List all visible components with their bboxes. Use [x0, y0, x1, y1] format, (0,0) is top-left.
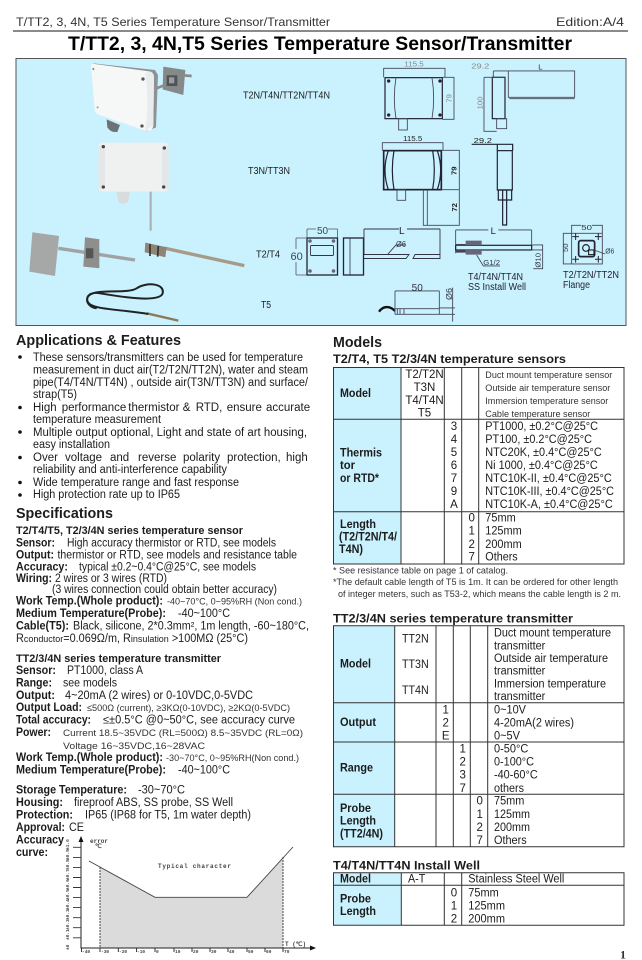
feature list: polarity [183, 452, 220, 464]
table: install well: 125mm [468, 900, 505, 912]
chart: accuracy curve: ±0 [65, 944, 71, 950]
row: Thermistor or RTD: Ni 1000, ±0.4°C@25°C [485, 460, 598, 472]
row: Probe Length [340, 796, 530, 847]
transmitter specifications: Total accuracy: [16, 714, 91, 726]
chart: accuracy curve: ±0.2 [65, 919, 71, 930]
heading: install well: T4/T4N/TT4N Install Well [333, 858, 480, 872]
row: Thermistor or RTD: Thermis [340, 448, 382, 460]
row: Thermistor or RTD: PT100, ±0.2°C@25°C [485, 434, 592, 446]
chart: accuracy curve: ±0.6 [65, 879, 71, 890]
row: Range: 0-100°C [494, 757, 534, 769]
drawing: install well [456, 226, 543, 269]
table notes: of integer meters, such as T53-2, which means the cable length is 2 m. [338, 589, 621, 600]
feature list: easy installation [33, 439, 110, 451]
feature list: high [286, 452, 308, 464]
row: Model: Model [340, 659, 371, 671]
heading: Specifications: Specifications [16, 505, 113, 522]
table notes [333, 566, 621, 600]
table: install well: 2 [451, 914, 457, 926]
heading: temperature sensors: T2/T4, T5 T2/3/4N temperature sensors [333, 352, 566, 366]
general specifications: Housing: [16, 797, 63, 809]
row: Thermistor or RTD: 9 [451, 486, 457, 498]
table notes: * See resistance table on page 1 of catalog. [333, 566, 508, 576]
chart: accuracy curve: 0 [156, 949, 159, 955]
general specifications: fireproof ABS, SS probe, SS Well [74, 797, 233, 809]
transmitter specifications: -40~100°C [178, 764, 230, 776]
chart: accuracy curve: 20 [193, 949, 199, 955]
chart: accuracy curve: Typical character [158, 863, 231, 870]
sensor specifications: Output: [16, 550, 54, 562]
chart: accuracy curve: T (℃) [285, 941, 306, 948]
transmitter specifications: Output Load: [16, 702, 82, 714]
feature list: measurement in duct air(T2/T2N/TT2N), water and steam [33, 364, 308, 376]
row: Range [340, 743, 538, 795]
drawing: T5 probe: 50 [412, 283, 423, 294]
general specifications: Storage Temperature: [16, 784, 127, 796]
row: Range: Range [340, 763, 373, 775]
row: Probe Length: 7 [476, 835, 483, 847]
table: install well: A-T [408, 874, 425, 886]
row: Output: 4-20mA(2 wires) [494, 717, 574, 729]
sensor specifications: Sensor: [16, 538, 55, 550]
row: Thermistor or RTD: NTC10K-A, ±0.4°C@25°C [485, 499, 613, 511]
feature list: RTD, [196, 402, 222, 414]
row: Length: 7 [468, 552, 475, 564]
row: Length: Length [340, 519, 376, 531]
heading: Applications & Features: Applications & Features [16, 332, 181, 349]
transmitter specifications: ≤500Ω (current), ≥3KΩ(0-10VDC), ≥2KΩ(0-5VDC) [87, 703, 290, 714]
drawing: flange: Ø6 [605, 246, 614, 255]
chart: accuracy curve: 30 [211, 949, 217, 955]
label: T4/T4N/TT4N SS Install Well [468, 272, 526, 293]
chart: accuracy curve: ±0.5 [65, 889, 71, 900]
row: Probe Length: Others [494, 835, 527, 847]
row: Output: 0~5V [494, 731, 520, 743]
row: Thermistor or RTD: PT1000, ±0.2°C@25°C [485, 421, 598, 433]
chart: accuracy curve: ±0.1 [65, 929, 71, 940]
row: Probe Length: 0 [476, 796, 483, 808]
row: Output [340, 705, 574, 743]
chart: accuracy curve: ±0.3 [65, 909, 71, 920]
table: install well: Probe [340, 894, 371, 906]
feature list: temperature measurement [33, 414, 162, 426]
transmitter specifications: Power: [16, 727, 51, 739]
table: install well: 75mm [468, 888, 499, 900]
sensor specifications: Accuracy: [16, 562, 68, 574]
row: Length: T4N) [339, 544, 363, 556]
row: Model: T3N [414, 382, 435, 394]
row: Output: 1 [442, 705, 449, 717]
table: install well: Model [340, 874, 371, 886]
drawing: T3N front view: 72 [450, 203, 459, 212]
transmitter specifications: -30~70°C, 0~95%RH(Non cond.) [166, 753, 299, 764]
drawing: T2 front and probe [290, 226, 440, 275]
row: Length: Others [485, 552, 518, 564]
chart: accuracy curve: -30 [101, 949, 109, 955]
transmitter specifications: Current 18.5~35VDC (RL=500Ω) 8.5~35VDC (RL=0Ω) [63, 728, 303, 739]
drawing: T2N front view [384, 60, 454, 130]
label: T2/T2N/TT2N Flange [563, 270, 619, 291]
row: Length: 2 [468, 539, 475, 551]
row: Thermistor or RTD [340, 421, 614, 511]
general specifications: curve: [16, 847, 48, 859]
page header: T/TT2, 3, 4N, T5 Series Temperature Sensor/Transmitter [16, 15, 330, 29]
transmitter specifications: Medium Temperature(Probe): [16, 764, 166, 776]
drawing: T3N front view: 79 [449, 166, 458, 175]
table: install well: 1 [451, 900, 457, 912]
sensor specifications: High accuracy thermistor or RTD, see models [67, 538, 276, 550]
row: Thermistor or RTD: 7 [451, 473, 457, 485]
sensor specifications: thermistor or RTD, see models and resistance table [58, 550, 297, 562]
transmitter specifications: ≤±0.5°C @0~50°C, see accuracy curve [103, 714, 295, 726]
label: T3N/TT3N: T3N/TT3N [248, 166, 290, 177]
row: Range: -40-60°C [494, 770, 538, 782]
row: Thermistor or RTD: A [450, 499, 458, 511]
row: Length: 200mm [485, 539, 522, 551]
table: install well: Stainless Steel Well [468, 874, 564, 886]
drawing: T5 probe [379, 283, 455, 322]
row: Probe Length: Probe [340, 803, 371, 815]
row: Model: T4/T4N [405, 395, 444, 407]
drawing: flange: 50 [561, 243, 570, 252]
row: Length: (T2/T2N/T4/ [339, 532, 398, 544]
heading: Models: Models [333, 334, 382, 351]
general specifications: IP65 (IP68 for T5, 1m water depth) [85, 810, 251, 822]
drawing: T3N front view [382, 134, 459, 225]
row: Model: Duct mount temperature [494, 628, 611, 640]
general specifications: CE [69, 822, 84, 834]
drawing: flange: 50 [581, 223, 592, 232]
chart: accuracy curve: -20 [119, 949, 127, 955]
sensor specifications: -40~70°C, 0~95%RH (Non cond.) [167, 596, 302, 608]
row: Model: Duct mount temperature sensor [485, 370, 612, 381]
table: install well: 0 [451, 888, 457, 900]
chart: accuracy curve: -40 [82, 949, 90, 955]
feature list: High [33, 402, 57, 414]
transmitter specifications: TT2/3/4N series temperature transmitter [16, 653, 222, 665]
row: Model: Model [340, 388, 371, 400]
row: Thermistor or RTD: NTC20K, ±0.4°C@25°C [485, 447, 602, 459]
drawing: T2N side view: 29.2 [471, 61, 489, 70]
row: Output: Output [340, 717, 376, 729]
feature list: Wide temperature range and fast response [33, 477, 239, 489]
page header: Edition:A/4 [556, 15, 624, 29]
row: Range: 3 [459, 770, 466, 782]
label: T2/T4: T2/T4 [256, 250, 280, 260]
row: Length: 0 [468, 513, 475, 525]
transmitter specifications [16, 653, 303, 776]
feature list: performance [62, 402, 126, 414]
table: install well [334, 873, 624, 926]
chart: accuracy curve: ±0.8 [65, 859, 71, 870]
label: T2N/T4N/TT2N/TT4N: T2N/T4N/TT2N/TT4N [243, 90, 330, 102]
drawing: T3N side view [472, 136, 513, 225]
row: Output: 2 [442, 717, 449, 729]
table: temperature transmitter [334, 626, 624, 847]
sensor specifications: Cable(T5): [16, 620, 69, 632]
sensor specifications: Medium Temperature(Probe): [16, 608, 166, 620]
chart: accuracy curve: ±0.9 [65, 849, 71, 860]
drawing: T2 front and probe: Ø6 [396, 240, 407, 249]
photo: T2 duct probe [29, 232, 135, 276]
chart: accuracy curve: 60 [266, 949, 272, 955]
photo: outside air sensor [98, 143, 169, 231]
row: Model: Cable temperature sensor [485, 409, 590, 420]
label: T2/T2N/TT2N Flange: T2/T2N/TT2N [563, 270, 619, 281]
sensor specifications: Black, silicone, 2*0.3mm², 1m length, -60~180°C, [73, 620, 309, 632]
row: Model: transmitter [494, 666, 545, 678]
table: install well: 200mm [468, 914, 505, 926]
general specifications: Protection: [16, 810, 73, 822]
feature list: reliability and anti-interference capability [33, 464, 227, 476]
sensor specifications: Wiring: [16, 573, 52, 585]
label: T5: T5 [261, 300, 271, 311]
row: Length: 125mm [485, 526, 522, 538]
row: Model: T5 [418, 408, 431, 420]
feature list [18, 352, 310, 501]
sensor specifications: 2 wires or 3 wires (RTD) [55, 573, 167, 585]
sensor specifications: typical ±0.2~0.4°C@25°C, see models [79, 562, 256, 574]
drawing: T2N side view: L [538, 62, 543, 71]
table: temperature sensors [334, 368, 624, 564]
drawing: install well: Ø10 [534, 253, 543, 268]
row: Thermistor or RTD: 6 [451, 460, 457, 472]
transmitter specifications: PT1000, class A [67, 665, 143, 677]
feature list: Multiple output optional, Light and state of art housing, [33, 427, 307, 439]
row: Probe Length: 2 [476, 822, 483, 834]
label: T2/T2N/TT2N Flange: Flange [563, 280, 590, 291]
row: Thermistor or RTD: 4 [451, 434, 458, 446]
row: Thermistor or RTD: 3 [451, 421, 457, 433]
row: Range: 1 [459, 743, 466, 755]
feature list: ensure [227, 402, 262, 414]
row: Probe Length: 125mm [494, 809, 530, 821]
label: T4/T4N/TT4N SS Install Well: SS Install Well [468, 282, 526, 293]
table: install well: Length [340, 906, 376, 918]
chart: accuracy curve: ±0.7 [65, 869, 71, 880]
general specifications: -30~70°C [138, 784, 185, 796]
feature list: reverse [138, 452, 176, 464]
row: Thermistor or RTD: or RTD* [340, 473, 379, 485]
row: Model [340, 369, 612, 420]
general specifications: Approval: [16, 822, 65, 834]
heading: temperature transmitter: TT2/3/4N series temperature transmitter [333, 612, 573, 626]
row: Range: others [494, 783, 524, 795]
title: T/TT2, 3, 4N,T5 Series Temperature Sensor/Transmitter [68, 33, 572, 55]
row: Output: E [442, 731, 450, 743]
chart: accuracy curve [65, 836, 316, 955]
chart: accuracy curve: ±1.0 [65, 839, 71, 850]
row: Thermistor or RTD: NTC10K-III, ±0.4°C@25°C [485, 486, 614, 498]
chart: accuracy curve: error [90, 838, 108, 845]
row: Range: 0-50°C [494, 743, 528, 755]
general specifications [16, 784, 251, 859]
drawing: T3N front view: 115.5 [403, 134, 422, 143]
feature list: Over [33, 452, 58, 464]
transmitter specifications: 4~20mA (2 wires) or 0-10VDC,0-5VDC [65, 690, 253, 702]
row: Model: Outside air temperature [494, 653, 608, 665]
transmitter specifications: Output: [16, 690, 55, 702]
table notes: *The default cable length of T5 is 1m. It can be ordered for other length [333, 577, 618, 588]
row: Probe Length: 75mm [494, 796, 524, 808]
drawing: T2N side view: 100 [476, 97, 485, 109]
panel: products and dimensions [16, 58, 626, 326]
chart: accuracy curve: -10 [137, 949, 145, 955]
feature list: thermistor [128, 402, 180, 414]
row: Model: Outside air temperature sensor [485, 383, 610, 394]
drawing: flange [561, 223, 614, 264]
drawing: T2 front and probe: 60 [290, 251, 303, 263]
row: Probe Length: (TT2/4N) [340, 828, 383, 840]
row: Probe Length: 200mm [494, 822, 530, 834]
chart: accuracy curve: 70 [284, 949, 290, 955]
row: Thermistor or RTD: NTC10K-II, ±0.4°C@25°C [485, 473, 612, 485]
photo: duct mount sensor [91, 63, 192, 132]
chart: accuracy curve: 50 [248, 949, 254, 955]
row: Range: 2 [459, 757, 466, 769]
drawing: install well: L [491, 226, 496, 236]
drawing: T2 front and probe: L [399, 226, 405, 237]
feature list: High protection rate up to IP65 [33, 489, 180, 501]
row: Model: transmitter [494, 691, 545, 703]
sensor specifications [16, 525, 309, 645]
feature list: & [183, 402, 191, 414]
drawing: T2N side view [471, 61, 575, 131]
feature list: protection, [227, 452, 281, 464]
row: Model: TT2N [402, 634, 429, 646]
drawing: T5 probe: Ø6 [445, 287, 454, 300]
row: Thermistor or RTD: 5 [451, 447, 457, 459]
label: T4/T4N/TT4N SS Install Well: T4/T4N/TT4N [468, 272, 523, 283]
sensor specifications: -40~100°C [178, 608, 230, 620]
row: Length [339, 513, 522, 564]
row: Probe Length: Length [340, 815, 376, 827]
general specifications: Accuracy [16, 834, 65, 846]
row: Model [340, 628, 611, 703]
transmitter specifications: see models [63, 678, 117, 690]
sensor specifications: Work Temp.(Whole product): [16, 596, 163, 608]
row: Output: 0~10V [494, 705, 526, 717]
photo: T4 immersion probe [145, 243, 244, 266]
transmitter specifications: Range: [16, 678, 52, 690]
row: Length: 75mm [485, 513, 516, 525]
row: Model: Immersion temperature [494, 678, 606, 690]
drawing: T2N front view: 79 [444, 94, 453, 103]
row: Model: TT4N [402, 685, 429, 697]
photo: T5 cable probe [87, 284, 178, 321]
sensor specifications: Rconductor=0.069Ω/m, Rinsulation >100MΩ (25°C) [16, 633, 248, 645]
drawing: T3N side view: 29.2 [474, 136, 492, 145]
feature list: accurate [266, 402, 310, 414]
row: Model: T2/T2N [405, 369, 444, 381]
drawing: T2N front view: 115.5 [404, 60, 424, 69]
chart: accuracy curve: 40 [229, 949, 235, 955]
sensor specifications: (3 wires connection could obtain better accuracy) [52, 584, 277, 596]
transmitter specifications: Sensor: [16, 665, 56, 677]
row: Model: TT3N [402, 659, 429, 671]
feature list: strap(T5) [33, 389, 77, 401]
transmitter specifications: Voltage 16~35VDC,16~28VAC [63, 741, 205, 752]
chart: accuracy curve: ±0.4 [65, 899, 71, 910]
chart: accuracy curve: 10 [175, 949, 181, 955]
feature list: pipe(T4/T4N/TT4N) , outside air(T3N/TT3N) and surface/ [33, 377, 309, 389]
transmitter specifications: Work Temp.(Whole product): [16, 752, 163, 764]
row: Thermistor or RTD: tor [340, 460, 355, 472]
feature list: These sensors/transmitters can be used for temperature [33, 352, 303, 364]
page header [13, 15, 628, 32]
feature list: and [110, 452, 129, 464]
row: Probe Length: 1 [476, 809, 483, 821]
drawing: T2 front and probe: 50 [317, 226, 329, 237]
feature list: voltage [65, 452, 102, 464]
drawing: install well: G1/2 [483, 258, 500, 267]
row: Model: transmitter [494, 640, 545, 652]
row: Range: 7 [459, 783, 466, 795]
row: Model: Immersion temperature sensor [485, 396, 608, 407]
sensor specifications: T2/T4/T5, T2/3/4N series temperature sensor [16, 525, 244, 537]
chart: accuracy curve: ℃ [95, 843, 102, 850]
row: Length: 1 [468, 526, 475, 538]
